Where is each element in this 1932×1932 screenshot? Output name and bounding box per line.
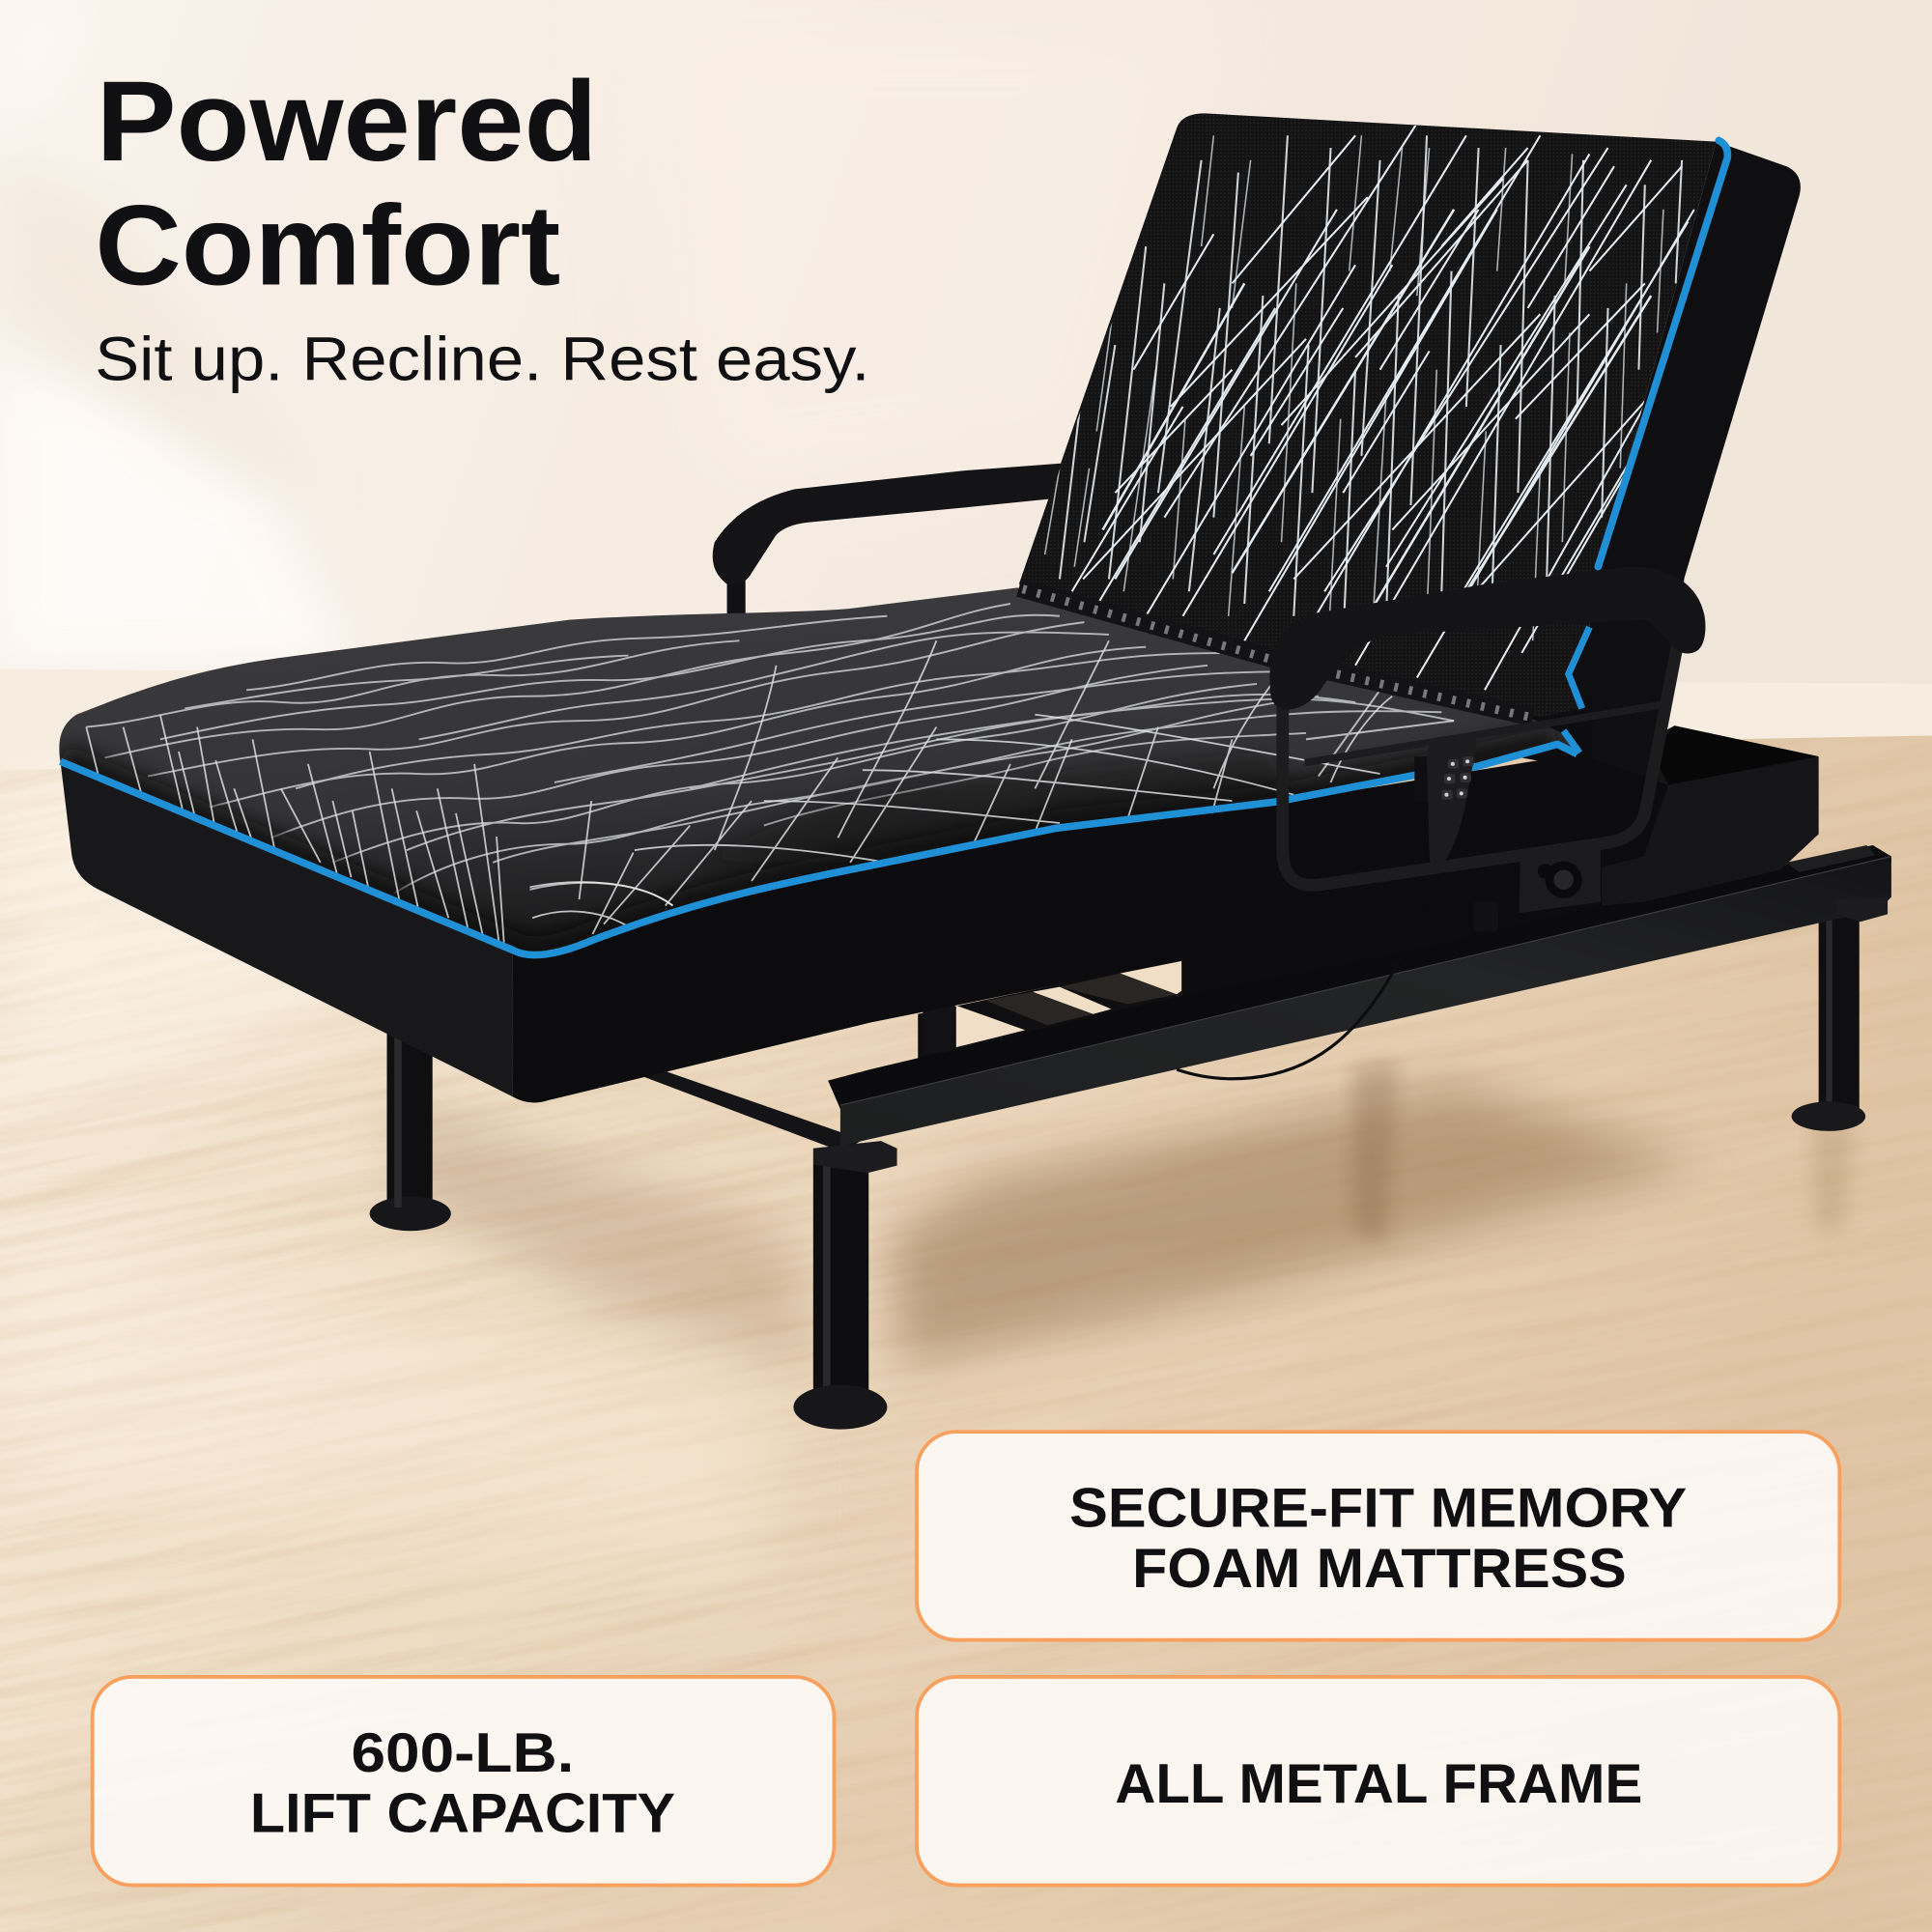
title: Comfort: [95, 183, 560, 310]
mattress side: left face: [60, 761, 513, 1096]
backrest side panel: [1569, 142, 1801, 813]
leg: rear inner: [923, 1005, 955, 1054]
back armrest: [713, 464, 1062, 616]
hinge band between seat and backrest: [1019, 587, 1533, 717]
wood floor: [0, 735, 1932, 1932]
card: 600-lb lift capacity: [93, 1677, 835, 1886]
card: 600-lb lift capacity: LIFT CAPACITY: [250, 1783, 675, 1845]
leg: back left: [370, 1029, 451, 1231]
footbox behind mattress: [1602, 725, 1819, 906]
front armrest frame: [1283, 647, 1677, 885]
subtitle: Sit up. Recline. Rest easy.: [95, 324, 870, 393]
small connector: [1474, 902, 1498, 931]
under-bed motor block: [1181, 838, 1780, 1001]
seat blue piping: [60, 744, 1577, 955]
lower blue piping near arm: [1564, 627, 1589, 753]
card: 600-lb lift capacity: 600-LB.: [352, 1722, 574, 1784]
under-bed slat zone with floor gaps: [918, 958, 1181, 1065]
seat mesh cover: [49, 579, 1589, 974]
card: all metal frame: ALL METAL FRAME: [1115, 1753, 1642, 1815]
card: secure-fit memory foam mattress: [917, 1432, 1839, 1640]
leg: front right: [1792, 906, 1865, 1131]
mattress side: front face: [513, 754, 1668, 1102]
leg: front center: [793, 1164, 887, 1430]
remote cable: [1177, 863, 1436, 1079]
backrest mesh cover: [1019, 113, 1717, 717]
title: [95, 58, 598, 310]
remote control: [1414, 735, 1476, 868]
front armrest pad: [1269, 567, 1705, 709]
backrest blue piping: [1598, 140, 1727, 567]
power outlet plate: [1520, 842, 1601, 913]
steel frame rail: [813, 845, 1891, 1173]
wall background: [0, 0, 1932, 788]
title: Powered: [96, 58, 598, 185]
floor shadow under bed: [394, 1060, 1855, 1368]
baseboard: [0, 669, 1932, 770]
card: all metal frame: [917, 1677, 1839, 1886]
dark gusset behind seat corner: [1521, 696, 1592, 770]
card: secure-fit memory foam mattress: SECURE-FIT MEMORY: [1069, 1477, 1687, 1539]
side bar of frame: [640, 1069, 863, 1152]
card: secure-fit memory foam mattress: FOAM MATTRESS: [1132, 1538, 1627, 1600]
